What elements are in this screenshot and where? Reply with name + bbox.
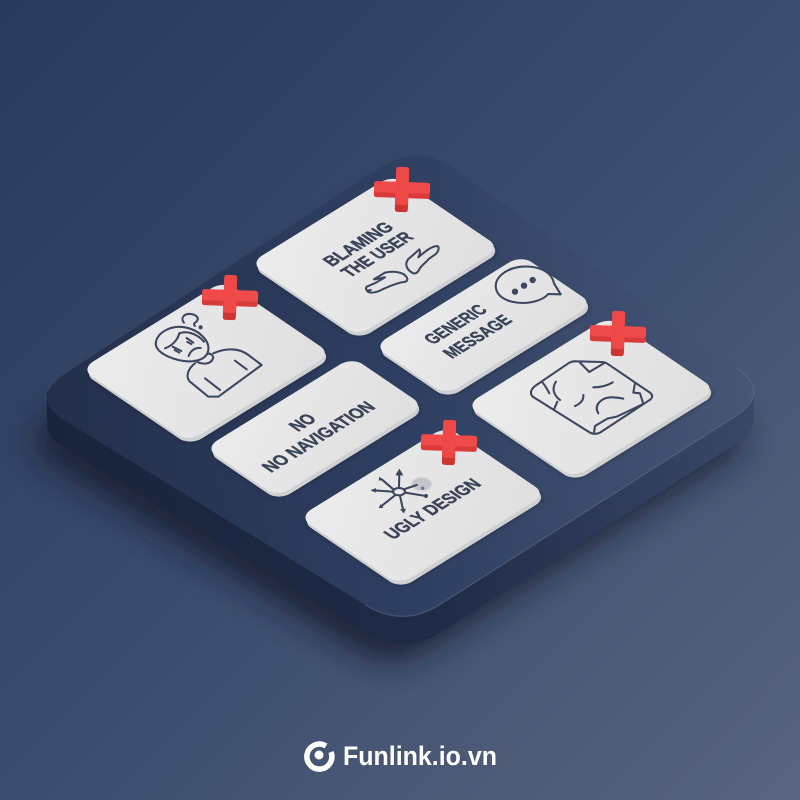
platform [35, 156, 754, 660]
icon: crumpled sad page [531, 361, 652, 434]
red cross: person [201, 274, 259, 321]
card: person [78, 281, 336, 447]
red cross: broken page [589, 310, 647, 357]
text: ugly design: UGLY DESIGN [380, 476, 486, 543]
red cross: blaming the user [373, 166, 431, 213]
text: no navigation: NO NAVIGATION [258, 399, 380, 476]
card: ugly design [296, 426, 550, 590]
card: generic message [371, 255, 597, 400]
icon: chat bubble [496, 266, 561, 303]
text: brand name: Funlink.io.vn [343, 741, 497, 771]
text: no navigation: NO [285, 411, 321, 435]
text: generic message [420, 302, 517, 362]
icon: frustrated person [156, 314, 262, 397]
text: generic message: GENERIC [420, 302, 492, 348]
icon: scattered arrows [371, 469, 432, 513]
icon: logo ring [307, 744, 332, 769]
card: blaming the user [247, 175, 505, 341]
icon: hands [366, 246, 439, 293]
text: generic message: MESSAGE [439, 312, 517, 362]
card: broken page [463, 317, 721, 483]
text: blaming the user: THE USER [337, 229, 418, 281]
text: blaming the user [319, 219, 418, 281]
text: no navigation [258, 399, 380, 476]
logo: Funlink [307, 741, 497, 771]
card: no navigation [202, 357, 428, 502]
text: blaming the user: BLAMING [319, 219, 399, 270]
red cross: ugly design [420, 419, 478, 466]
